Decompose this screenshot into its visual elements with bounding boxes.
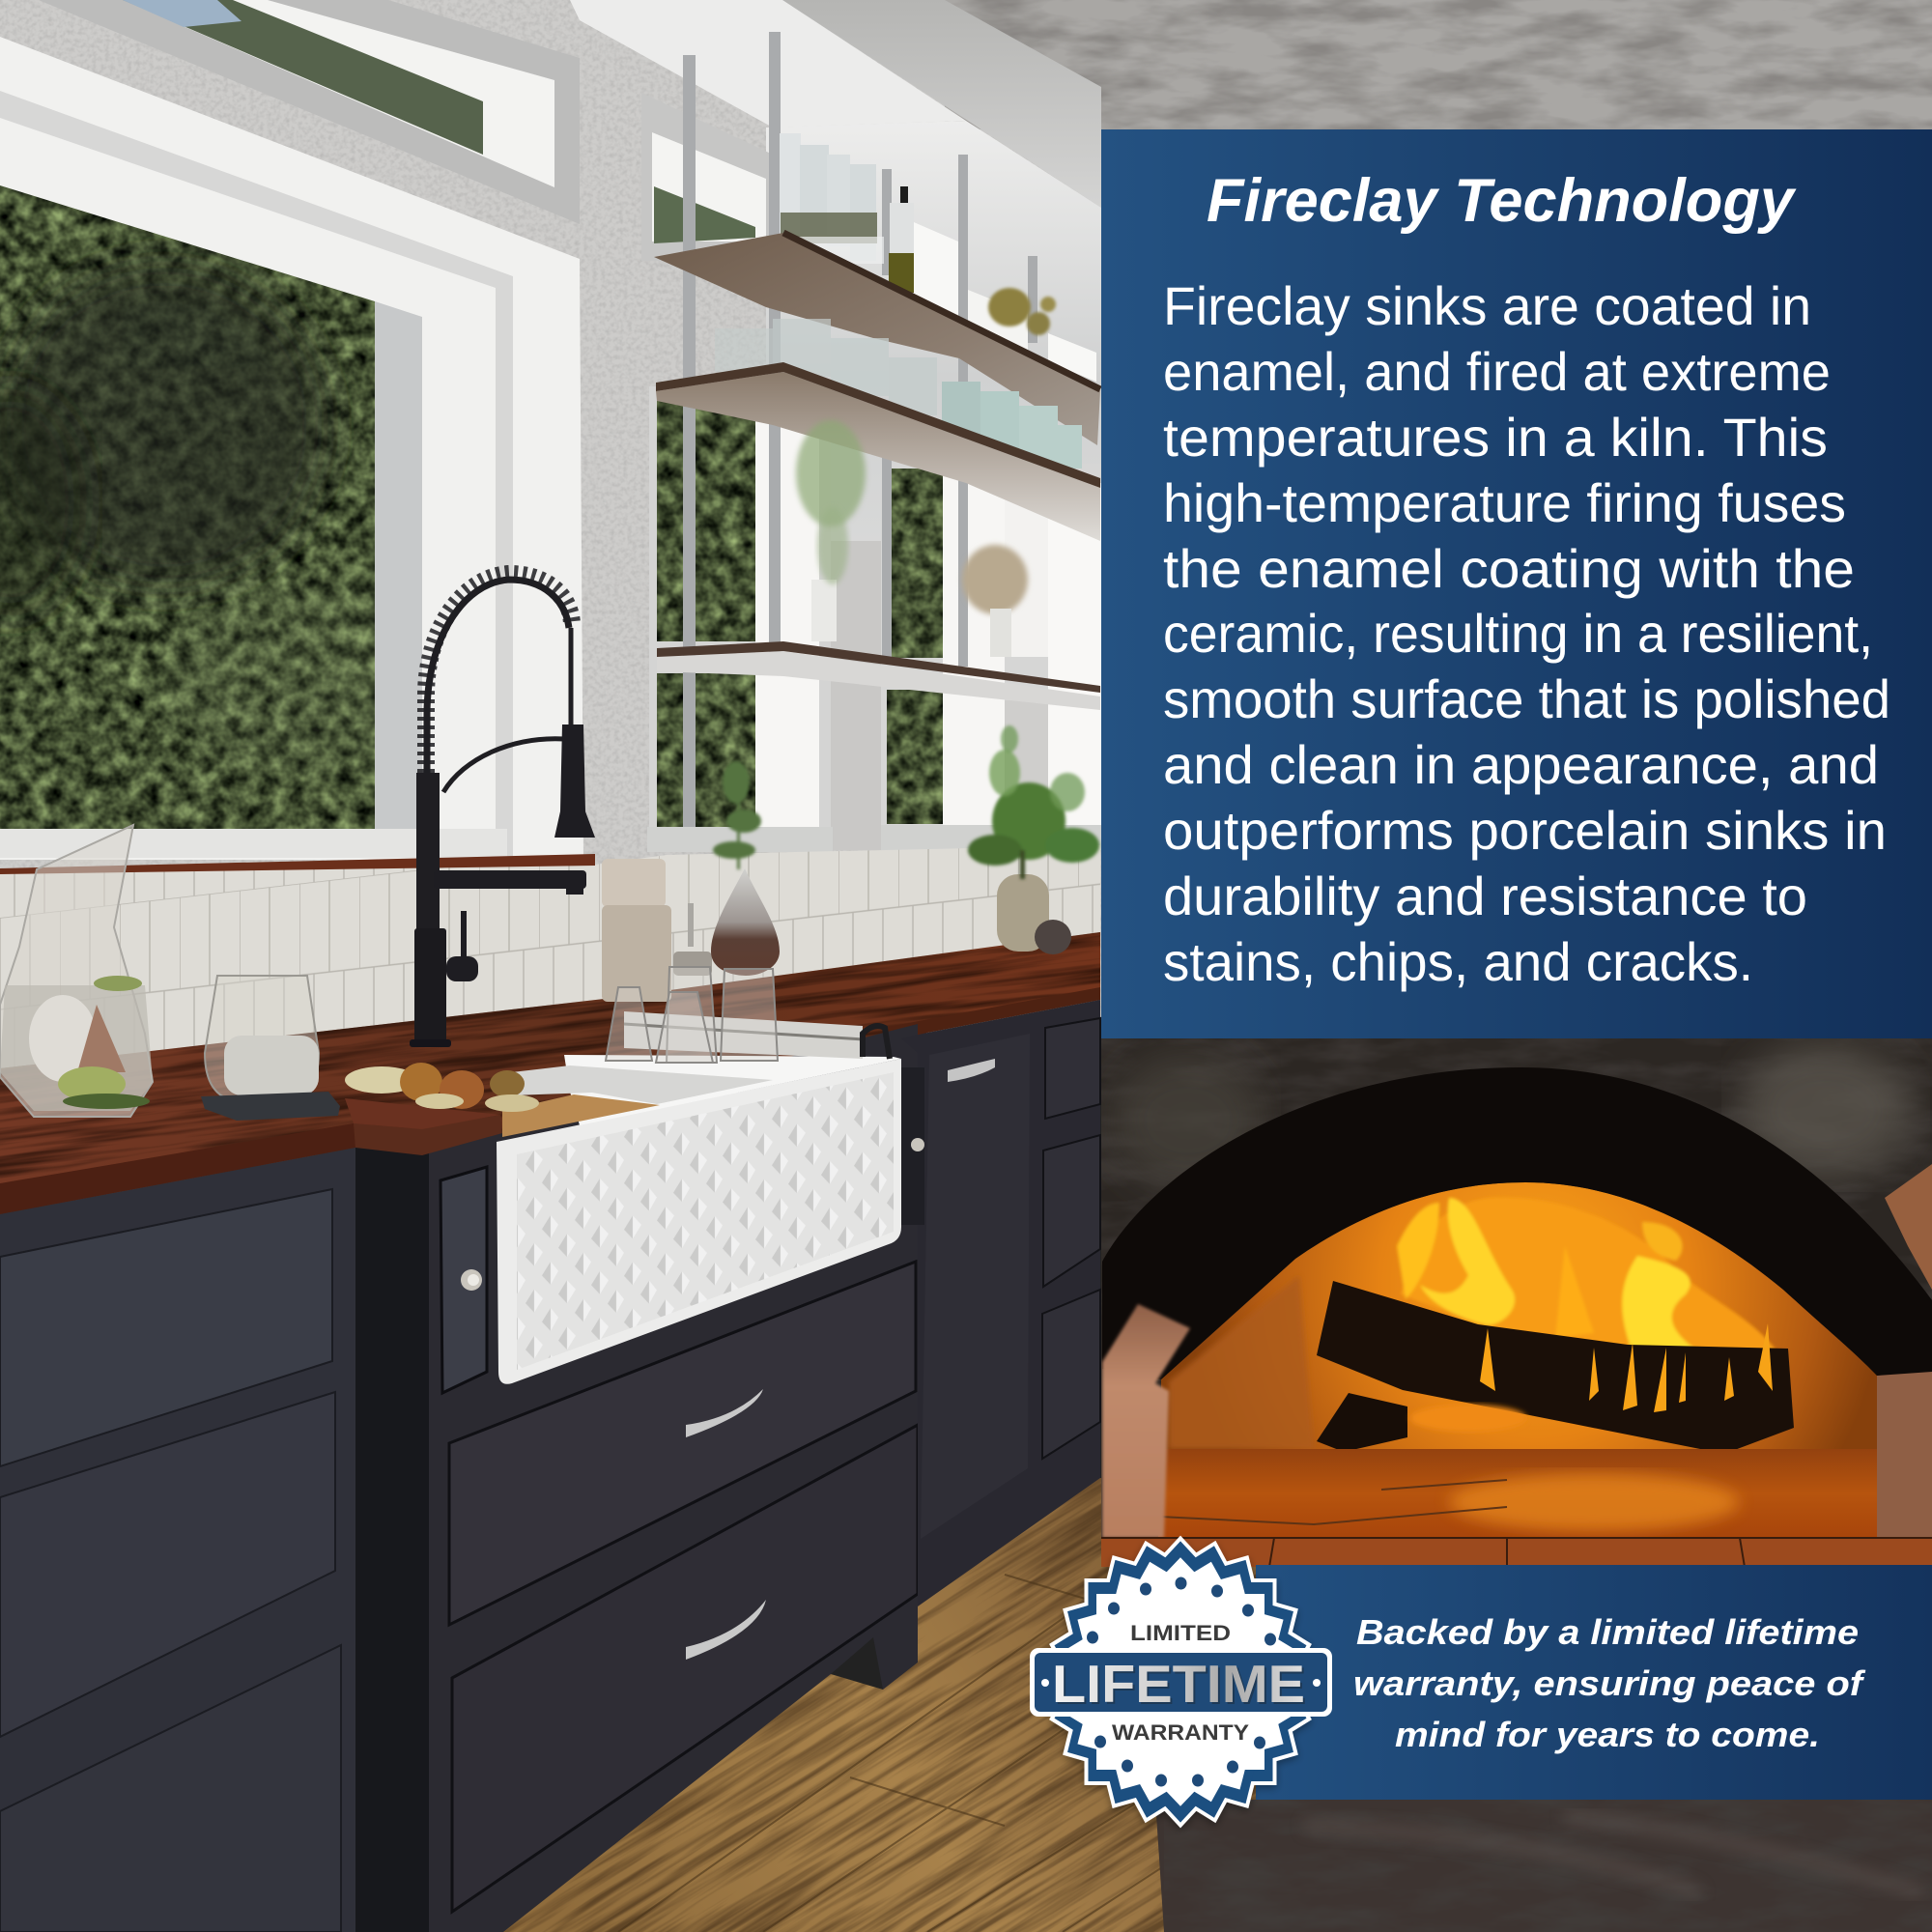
small sphere vase (1035, 920, 1071, 954)
back wall brick glow (1169, 1275, 1314, 1449)
folded napkin (201, 1092, 340, 1121)
oil bottle (889, 186, 914, 293)
dried pampas arrangement (962, 545, 1028, 657)
badge: limited lifetime warranty (1030, 1536, 1332, 1828)
metal shelf poles (683, 32, 1037, 847)
body text: high-temperature firing fuses (1163, 472, 1846, 533)
two tone vase (711, 868, 780, 976)
body text: outperforms porcelain sinks in (1163, 800, 1887, 861)
front brick row (1101, 1538, 1932, 1567)
soap dispenser (673, 903, 712, 976)
main window frame (0, 37, 583, 860)
body text: enamel, and fired at extreme (1163, 341, 1831, 402)
mushrooms (345, 1063, 539, 1112)
soffit (782, 0, 1101, 208)
warranty text: Backed by a limited lifetime (1356, 1612, 1859, 1652)
top wooden shelf (654, 233, 1100, 445)
ring of dots (1087, 1577, 1276, 1787)
counter return block (345, 1098, 502, 1155)
main window inner frame stripe (0, 91, 513, 860)
upper right windows (641, 93, 1096, 382)
lifetime ribbon: LIFETIME (1052, 1654, 1305, 1714)
door knob (461, 1269, 482, 1291)
right knob (911, 1138, 924, 1151)
middle wooden shelf (656, 362, 1100, 541)
counter right front edge (883, 987, 1100, 1055)
bottles on top shelf (780, 133, 884, 264)
body text: durability and resistance to (1163, 866, 1807, 926)
body text: Fireclay sinks are coated in (1163, 275, 1811, 336)
left cabinet door top (0, 1189, 332, 1466)
drawer lower (452, 1425, 918, 1912)
drying rack rollers (624, 1011, 890, 1059)
warranty text: warranty, ensuring peace of (1353, 1663, 1865, 1703)
window sill (0, 829, 507, 858)
small panel beside sink (901, 1067, 924, 1225)
warranty label: WARRANTY (1112, 1720, 1249, 1745)
cutting board (502, 1094, 660, 1137)
tan vase (997, 874, 1049, 952)
main window garden view (0, 185, 375, 829)
warranty text: mind for years to come. (1395, 1715, 1820, 1754)
orange brick corner (1885, 1164, 1932, 1290)
transom window frame (39, 0, 580, 224)
sink base cabinet (429, 1024, 918, 1932)
pizza oven fire photo (1101, 1038, 1932, 1567)
drawer upper (449, 1262, 916, 1625)
small log (1317, 1393, 1407, 1452)
tall door handle (948, 1059, 995, 1082)
badge seal (1044, 1536, 1317, 1828)
row of drinking glasses (715, 319, 1082, 469)
left cabinet door middle (0, 1392, 335, 1737)
glowing hearth floor (1158, 1449, 1877, 1538)
ceramic mugs (602, 859, 671, 1002)
farmhouse sink front (497, 1059, 901, 1384)
fire chamber (1161, 1182, 1877, 1449)
main burning log (1317, 1281, 1794, 1454)
lifetime ribbon (1030, 1648, 1332, 1717)
lifetime ribbon: LIFETIME (1054, 1656, 1307, 1716)
body text: stains, chips, and cracks. (1163, 931, 1753, 992)
flames (1397, 1197, 1777, 1352)
black pillar (355, 1148, 429, 1932)
lower drawer handle (686, 1600, 766, 1660)
right stack panels (1042, 1018, 1100, 1459)
left cabinet block (0, 1148, 429, 1932)
body text: smooth surface that is polished (1163, 668, 1890, 729)
flame tongues over log (1480, 1323, 1773, 1412)
heading: Fireclay Technology (1207, 167, 1797, 235)
dark wood plinth (1155, 1800, 1932, 1932)
warranty text (1353, 1612, 1865, 1754)
back wall behind shelves (766, 121, 1101, 850)
small plant on vase (713, 761, 761, 869)
body text (1163, 275, 1890, 992)
stucco wall (0, 0, 1101, 1063)
body text: ceramic, resulting in a resilient, (1163, 603, 1873, 664)
oven stone wall (1101, 1038, 1932, 1567)
narrow cabinet door (440, 1167, 487, 1393)
lower right windows group (649, 386, 1101, 850)
left pink brick wedge and pillar (1102, 1304, 1190, 1538)
transom trees (123, 0, 483, 155)
left cabinet door bottom (0, 1645, 341, 1932)
ceiling (945, 0, 1932, 129)
hanging plant in glass vase (796, 420, 866, 641)
water glass (205, 976, 319, 1101)
body text: and clean in appearance, and (1163, 734, 1879, 795)
upper drawer handle (686, 1389, 763, 1437)
embers (1410, 1405, 1526, 1432)
counter front edge (0, 1123, 355, 1214)
upside down glasses (606, 967, 778, 1063)
black soot arch (1102, 1067, 1932, 1379)
flowers on shelf (988, 288, 1056, 335)
tile backsplash (0, 845, 1100, 1068)
black pull down faucet (410, 574, 595, 1047)
transom white glass (123, 0, 554, 187)
white ceiling edge (570, 0, 966, 128)
wooden window ledge (0, 854, 595, 874)
limited label: LIMITED (1130, 1621, 1231, 1645)
wood floor (503, 1478, 1256, 1932)
glass pitcher with limes (0, 825, 153, 1117)
sink basin (512, 1065, 773, 1104)
bottom wooden shelf (657, 641, 1100, 710)
body text: temperatures in a kiln. This (1163, 407, 1828, 468)
green plant (968, 725, 1099, 879)
sink deck (564, 1055, 901, 1125)
panel: warranty statement (1256, 1565, 1932, 1800)
window reflection strip (375, 301, 422, 829)
body text: the enamel coating with the (1163, 538, 1855, 599)
sill bottom frames (647, 825, 1101, 852)
tall cabinet door (921, 1034, 1030, 1539)
right cabinet run (901, 1000, 1100, 1606)
right brick pillar (1877, 1369, 1932, 1538)
panel: fireclay technology text (1101, 129, 1932, 1038)
countertop (0, 932, 1100, 1214)
